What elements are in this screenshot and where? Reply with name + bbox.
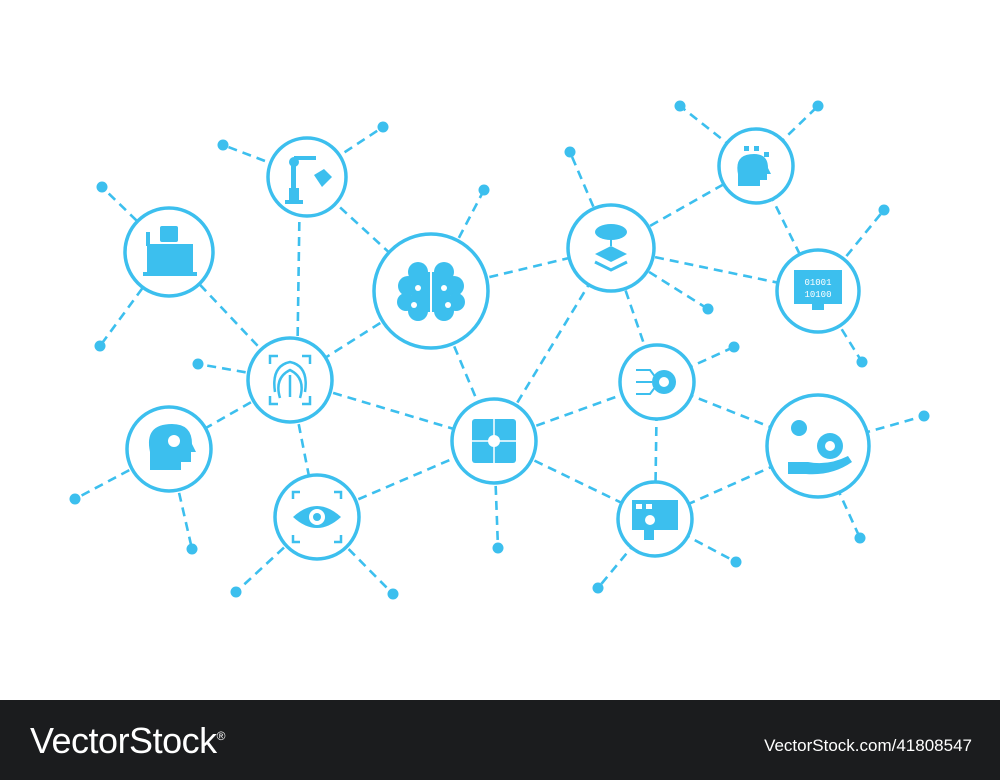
icon: fingerprint	[270, 356, 310, 404]
icon: hexagon chip	[472, 419, 516, 463]
footer bar	[0, 700, 1000, 780]
icon: robot at workstation	[143, 226, 197, 276]
footer logo: VectorStock®	[30, 720, 225, 761]
footer url: VectorStock.com/41808547	[764, 736, 972, 755]
icon: eye scan	[293, 492, 341, 542]
icon: pixel head	[737, 146, 771, 186]
icon: head gear circuit	[636, 370, 676, 394]
icon: robot arm	[285, 156, 332, 204]
icon: touch tablet	[632, 500, 678, 540]
icon: binary monitor	[794, 270, 842, 310]
icon: hand with gears	[788, 420, 852, 474]
icon: cloud layers	[595, 224, 627, 270]
icon: binary monitor: 10100	[804, 290, 832, 300]
icon: head with gear	[149, 424, 196, 470]
icon: brain	[397, 262, 465, 322]
icon: binary monitor: 01001	[804, 278, 832, 288]
